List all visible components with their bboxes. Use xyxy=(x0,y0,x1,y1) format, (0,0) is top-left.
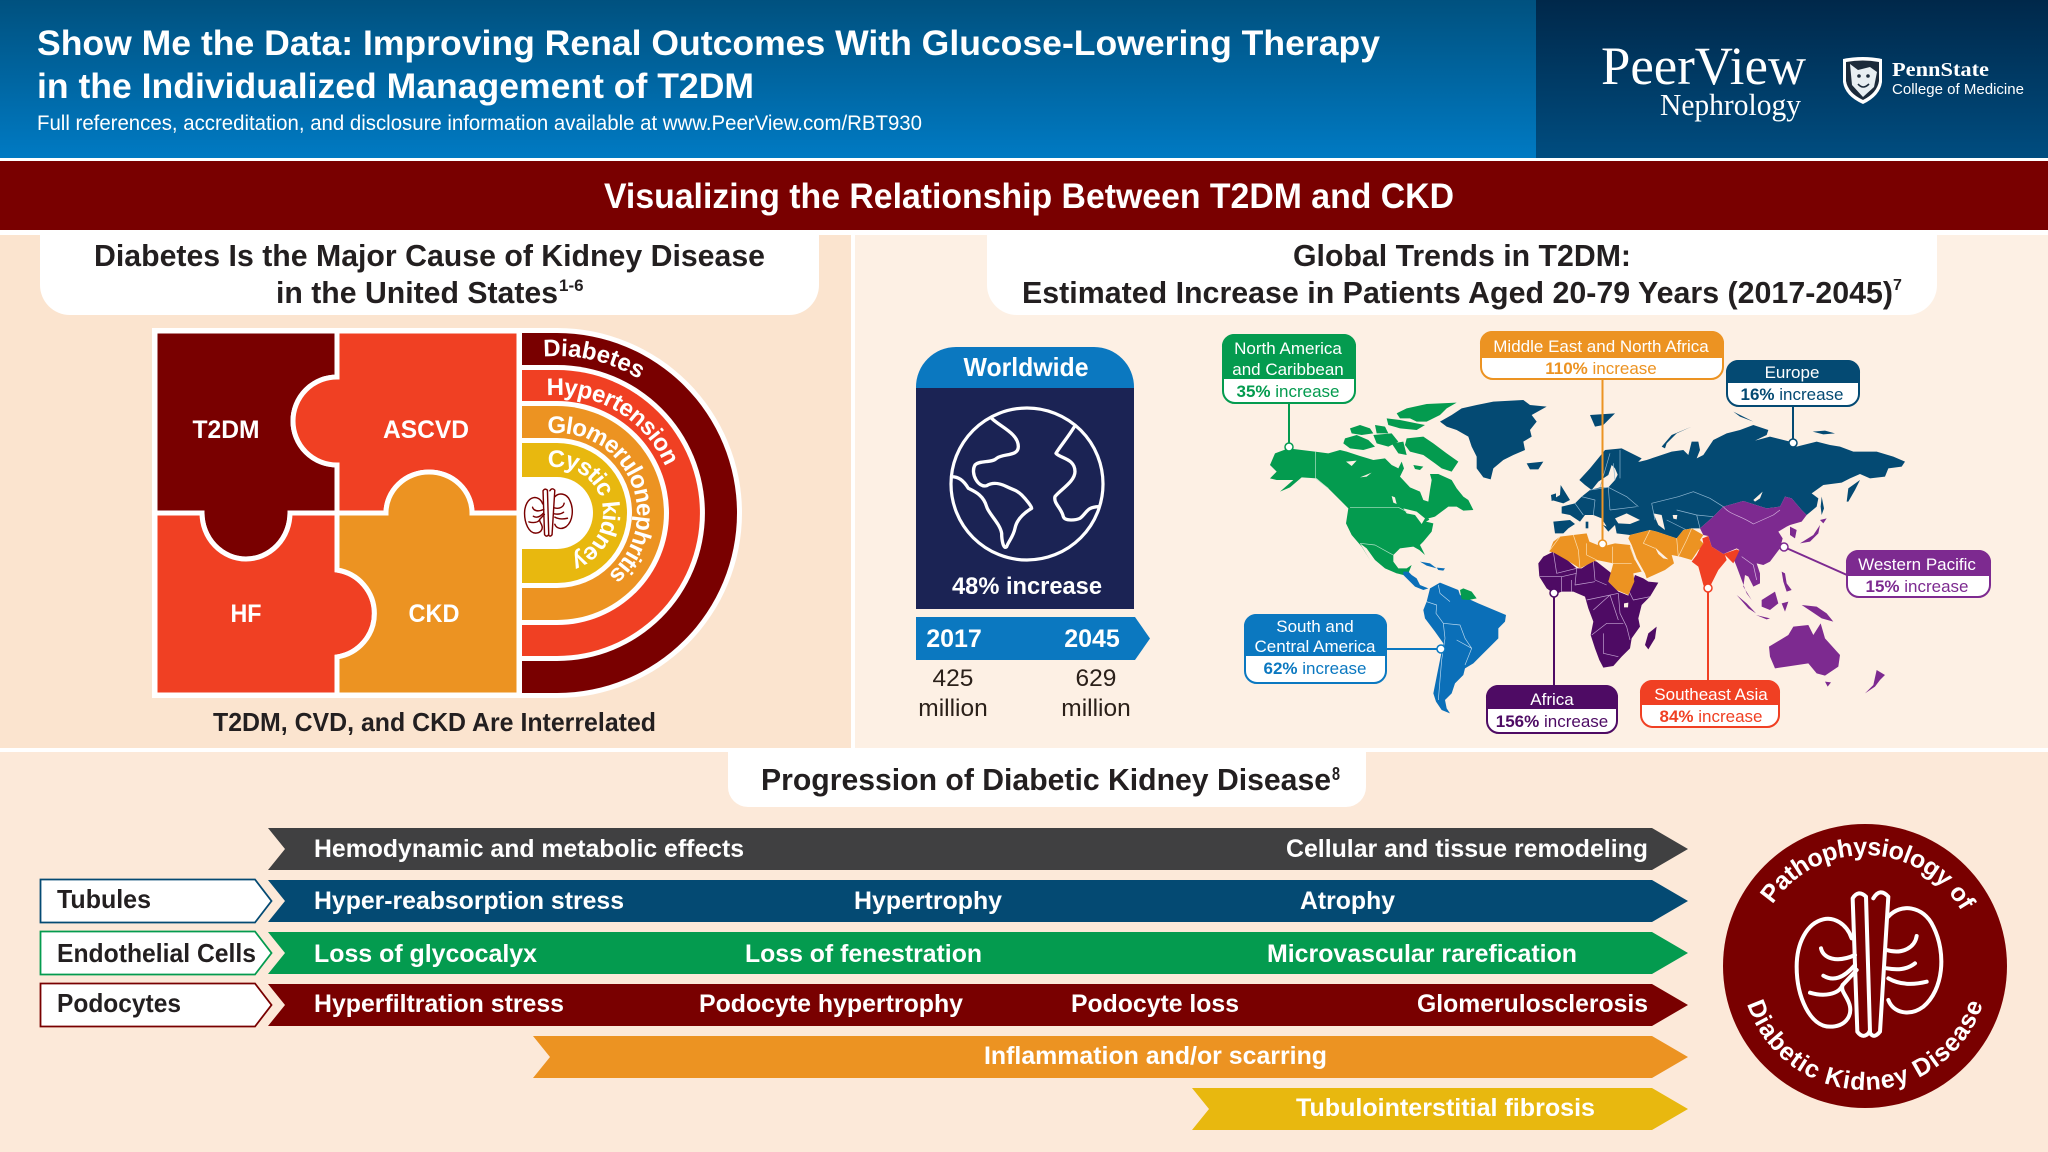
map: Greenland, Iceland and Cuba xyxy=(1403,400,1547,590)
puzzle piece: ASCVD xyxy=(293,331,519,513)
logo: PeerView Nephrology xyxy=(1601,36,1806,122)
arrow: podocytes row: Hyperfiltration stress xyxy=(314,990,564,1018)
heading: major cause xyxy=(40,235,819,315)
logo: Penn State text xyxy=(1892,59,2024,98)
puzzle piece: T2DM xyxy=(155,331,337,559)
puzzle labels: HF xyxy=(230,600,262,628)
world map xyxy=(1270,400,1905,713)
heading: major cause: Diabetes Is the Major Cause of Kidney Disease xyxy=(94,238,765,273)
arrow: tubules row: Hyper-reabsorption stress xyxy=(314,887,624,915)
heading: global trends xyxy=(987,235,1937,315)
heading: global trends: 7 xyxy=(1893,277,1902,294)
map: Western Pacific xyxy=(1700,497,1833,622)
arrow: hemodynamic row: Cellular and tissue remodeling xyxy=(1286,835,1648,863)
title: in the Individualized Management of T2DM xyxy=(37,67,754,106)
puzzle labels: ASCVD xyxy=(383,416,469,444)
timeline arrow 2017 to 2045: 2017 xyxy=(926,625,982,653)
row label: Endothelial Cells xyxy=(40,932,272,974)
callout: North America and Caribbean: 35% increase xyxy=(1236,382,1340,401)
timeline arrow 2017 to 2045 xyxy=(916,617,1150,722)
callout: Middle East and North Africa: 110% increase xyxy=(1545,359,1657,378)
arrow: tubules row xyxy=(268,880,1688,922)
title xyxy=(37,24,1381,106)
subtitle references line: Full references, accreditation, and disclosure information available at www.PeerView.com/RBT930 xyxy=(37,112,922,135)
worldwide card: Worldwide xyxy=(964,352,1088,382)
map: India xyxy=(1692,536,1739,590)
timeline arrow 2017 to 2045: 2045 xyxy=(1064,625,1120,653)
icon: large kidneys xyxy=(1797,892,1941,1036)
badge: pathophysiology of diabetic kidney disease: Pathophysiology of xyxy=(1760,838,1977,910)
callout: South and Central America: South and xyxy=(1276,617,1354,636)
title: Show Me the Data: Improving Renal Outcomes With Glucose-Lowering Therapy xyxy=(37,24,1381,63)
callout: Southeast Asia: Southeast Asia xyxy=(1654,685,1768,704)
heading: major cause: in the United States xyxy=(276,275,558,310)
kidney disease cause arcs: Diabetes xyxy=(544,338,643,378)
map: South America xyxy=(1423,583,1506,713)
heading: progression: 8 xyxy=(1332,764,1340,784)
panel: progression of diabetic kidney disease xyxy=(0,752,2048,1152)
heading: major cause: 1-6 xyxy=(559,276,584,295)
map: Africa xyxy=(1538,552,1658,668)
callout: Western Pacific: Western Pacific xyxy=(1858,555,1976,574)
callout: North America and Caribbean xyxy=(1222,334,1356,451)
puzzle labels: CKD xyxy=(408,600,460,628)
logo: PeerView Nephrology: Nephrology xyxy=(1660,87,1801,122)
timeline arrow 2017 to 2045: 629 xyxy=(1076,665,1116,692)
callout: Europe: 16% increase xyxy=(1740,385,1844,404)
arrow: inflammation: Inflammation and/or scarring xyxy=(984,1042,1327,1070)
heading: global trends: Estimated Increase in Patients Aged 20-79 Years (2017-2045) xyxy=(1022,275,1893,310)
row label: Tubules: Tubules xyxy=(57,884,151,914)
callout: South and Central America: 62% increase xyxy=(1263,659,1367,678)
callout: North America and Caribbean: North America xyxy=(1234,339,1342,358)
arrow: inflammation xyxy=(533,1036,1688,1078)
heading: progression xyxy=(728,748,1366,807)
icon: small kidneys xyxy=(525,489,572,536)
map: North America xyxy=(1270,403,1473,575)
worldwide card xyxy=(916,347,1134,609)
panel: global trends xyxy=(855,235,2048,748)
puzzle piece: HF xyxy=(155,513,374,695)
kidney disease cause arcs: Hypertension xyxy=(548,378,676,466)
header band xyxy=(0,0,2048,158)
timeline arrow 2017 to 2045: 425 xyxy=(933,665,973,692)
callout: North America and Caribbean: and Caribbean xyxy=(1232,360,1344,379)
callout: Southeast Asia xyxy=(1640,584,1780,727)
worldwide card: 48% increase xyxy=(952,573,1102,600)
arrow: endothelial row xyxy=(268,932,1688,974)
kidney disease cause arcs: Cystic kidney xyxy=(548,450,620,569)
callout: Africa: 156% increase xyxy=(1496,712,1608,731)
caption: interrelated: T2DM, CVD, and CKD Are Interrelated xyxy=(213,707,656,737)
puzzle labels: T2DM xyxy=(192,416,260,444)
arrow: podocytes row: Podocyte loss xyxy=(1071,990,1239,1018)
map: Middle East and North Africa xyxy=(1549,528,1705,595)
heading: global trends: Global Trends in T2DM: xyxy=(1293,238,1631,273)
icon: globe xyxy=(951,408,1103,560)
logo: Penn State text: College of Medicine xyxy=(1892,81,2024,98)
timeline arrow 2017 to 2045: million xyxy=(1061,695,1131,722)
callout: Europe: Europe xyxy=(1765,363,1819,382)
callout: South and Central America: Central America xyxy=(1255,637,1376,656)
puzzle diagram xyxy=(152,328,522,698)
badge: pathophysiology of diabetic kidney disease: Diabetic Kidney Disease xyxy=(1747,999,1982,1090)
arrow: tubules row: Hypertrophy xyxy=(854,887,1002,915)
row label: Endothelial Cells: Endothelial Cells xyxy=(57,938,256,968)
callout: Africa: Africa xyxy=(1530,690,1574,709)
timeline arrow 2017 to 2045: million xyxy=(918,695,988,722)
arrow: podocytes row xyxy=(268,984,1688,1026)
badge: pathophysiology of diabetic kidney disease xyxy=(1723,824,2007,1108)
logo: Penn State shield xyxy=(1843,57,1882,104)
callout: South and Central America xyxy=(1244,614,1445,683)
section banner xyxy=(0,161,2048,230)
arrow: podocytes row: Glomerulosclerosis xyxy=(1417,990,1648,1018)
kidney disease cause arcs xyxy=(522,328,742,698)
callout: Middle East and North Africa xyxy=(1480,331,1724,548)
logo: Penn State text: PennState xyxy=(1892,59,1989,81)
row label: Tubules xyxy=(40,880,272,922)
arrow: fibrosis: Tubulointerstitial fibrosis xyxy=(1296,1094,1595,1122)
arrow: hemodynamic row: Hemodynamic and metabolic effects xyxy=(314,835,744,863)
arrow: podocytes row: Podocyte hypertrophy xyxy=(699,990,963,1018)
heading: progression: Progression of Diabetic Kidney Disease xyxy=(761,762,1331,797)
section banner: Visualizing the Relationship Between T2DM and CKD xyxy=(604,177,1454,216)
kidney disease cause arcs: Glomerulonephritis xyxy=(548,416,652,582)
callout: Southeast Asia: 84% increase xyxy=(1659,707,1763,726)
arrow: endothelial row: Loss of fenestration xyxy=(745,940,982,968)
map: Australia and New Zealand xyxy=(1769,623,1885,693)
logo: PeerView Nephrology: PeerView xyxy=(1601,36,1806,96)
panel: diabetes causes of kidney disease xyxy=(0,235,851,748)
arrow: fibrosis xyxy=(1192,1088,1688,1130)
row label: Podocytes: Podocytes xyxy=(57,988,181,1018)
callout: Western Pacific xyxy=(1780,543,1991,597)
puzzle labels xyxy=(192,416,469,628)
arrow: endothelial row: Loss of glycocalyx xyxy=(314,940,537,968)
arrow: hemodynamic row xyxy=(268,828,1688,870)
row label: Podocytes xyxy=(40,984,272,1026)
arrow: tubules row: Atrophy xyxy=(1300,887,1395,915)
map: Europe and Russia xyxy=(1551,412,1905,538)
callout: Africa xyxy=(1486,589,1618,733)
callout: Middle East and North Africa: Middle East and North Africa xyxy=(1493,337,1709,356)
callout: Europe xyxy=(1726,360,1860,447)
arrow: endothelial row: Microvascular rarefication xyxy=(1267,940,1577,968)
callout: Western Pacific: 15% increase xyxy=(1865,577,1969,596)
puzzle piece: CKD xyxy=(337,472,519,695)
